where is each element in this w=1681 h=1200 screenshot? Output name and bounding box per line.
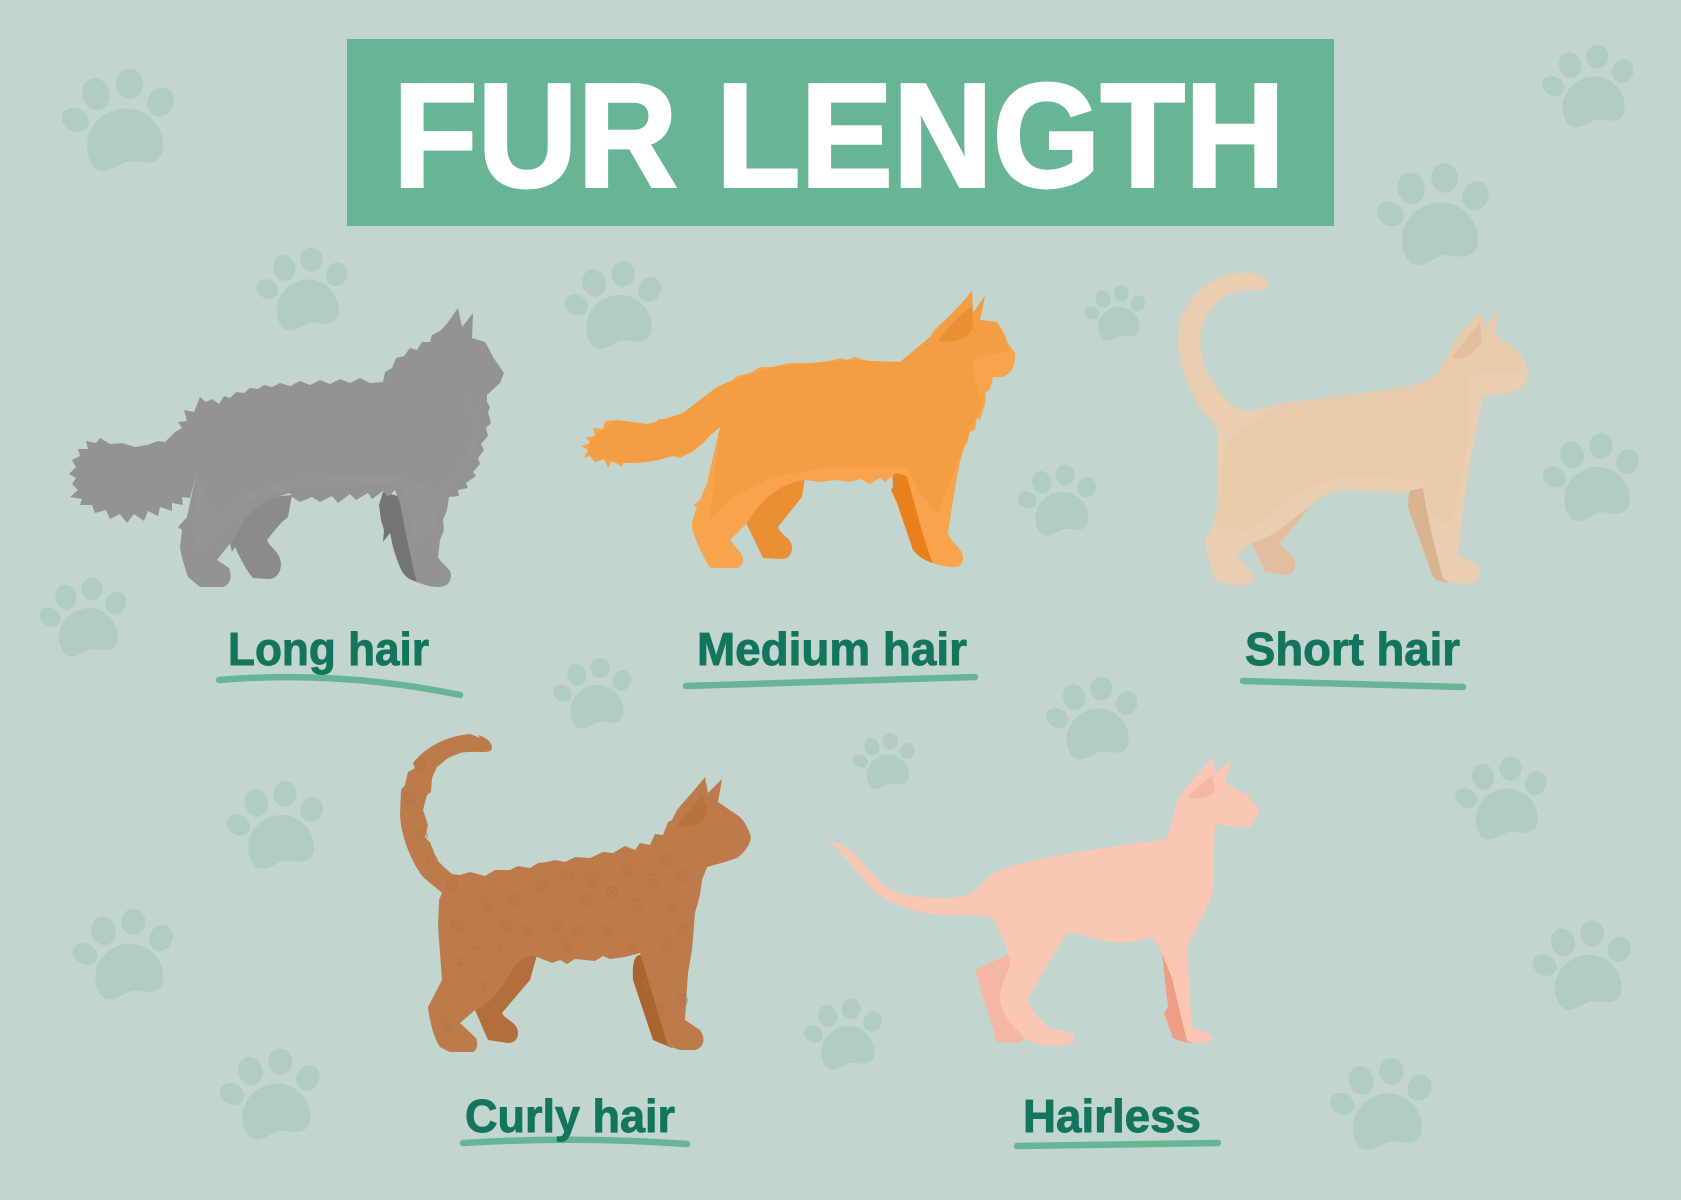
icon: paw (223, 781, 327, 869)
icon: paw (1539, 45, 1637, 128)
icon: paw (561, 261, 665, 349)
inner ear (938, 306, 973, 342)
icon: paw (851, 733, 917, 789)
far hind leg (228, 495, 292, 579)
cat: medium hair (581, 290, 1015, 568)
icon: paw (69, 909, 177, 1000)
icon: paw (550, 657, 634, 729)
icon: paw (801, 998, 885, 1070)
icon: paw (36, 578, 130, 657)
icon: paw (1452, 757, 1550, 840)
silhouette (400, 734, 751, 1052)
icon: paw (1043, 677, 1141, 760)
icon: paw (1082, 285, 1148, 341)
far front leg (1153, 937, 1192, 1043)
far hind leg (975, 955, 1027, 1043)
lighter near-leg fur (193, 392, 478, 550)
inner ear (677, 795, 708, 826)
icon: paw (216, 1049, 324, 1140)
cat: curly hair (400, 734, 751, 1052)
body shade (1215, 312, 1522, 530)
far hind leg (1240, 490, 1313, 575)
inner ear (1452, 322, 1482, 358)
far front leg (633, 955, 672, 1048)
label: curly hair: Curly hair (465, 1090, 675, 1142)
silhouette (1178, 273, 1528, 585)
label: long hair: Long hair (228, 623, 429, 675)
icon: paw (253, 248, 351, 331)
title banner (347, 39, 1334, 226)
body silhouette (827, 757, 1260, 1045)
far front leg (891, 470, 933, 563)
far front leg (379, 492, 424, 583)
icon: paw (1372, 163, 1494, 265)
title: FUR LENGTH (393, 54, 1285, 218)
label: hairless: Hairless (1023, 1090, 1201, 1142)
body silhouette (69, 308, 504, 587)
label: long hair (219, 623, 460, 695)
icon: paw (1326, 1058, 1436, 1150)
silhouette (581, 290, 1015, 568)
icon: paw (57, 69, 179, 171)
cat: long hair (69, 308, 504, 587)
curl texture (404, 760, 687, 1041)
icon: paw (1015, 464, 1099, 536)
icon: paw (1539, 433, 1643, 521)
cat: hairless (827, 757, 1260, 1045)
icon: paw (1529, 920, 1635, 1010)
inner ear (1187, 775, 1215, 799)
cat: short hair (1178, 273, 1528, 585)
far hind leg (735, 478, 805, 559)
far hind leg (465, 955, 537, 1043)
tail shade (588, 387, 720, 463)
body shade (710, 292, 1010, 520)
label: medium hair: Medium hair (697, 623, 967, 675)
far front leg (1408, 486, 1450, 583)
label: short hair: Short hair (1245, 623, 1460, 675)
